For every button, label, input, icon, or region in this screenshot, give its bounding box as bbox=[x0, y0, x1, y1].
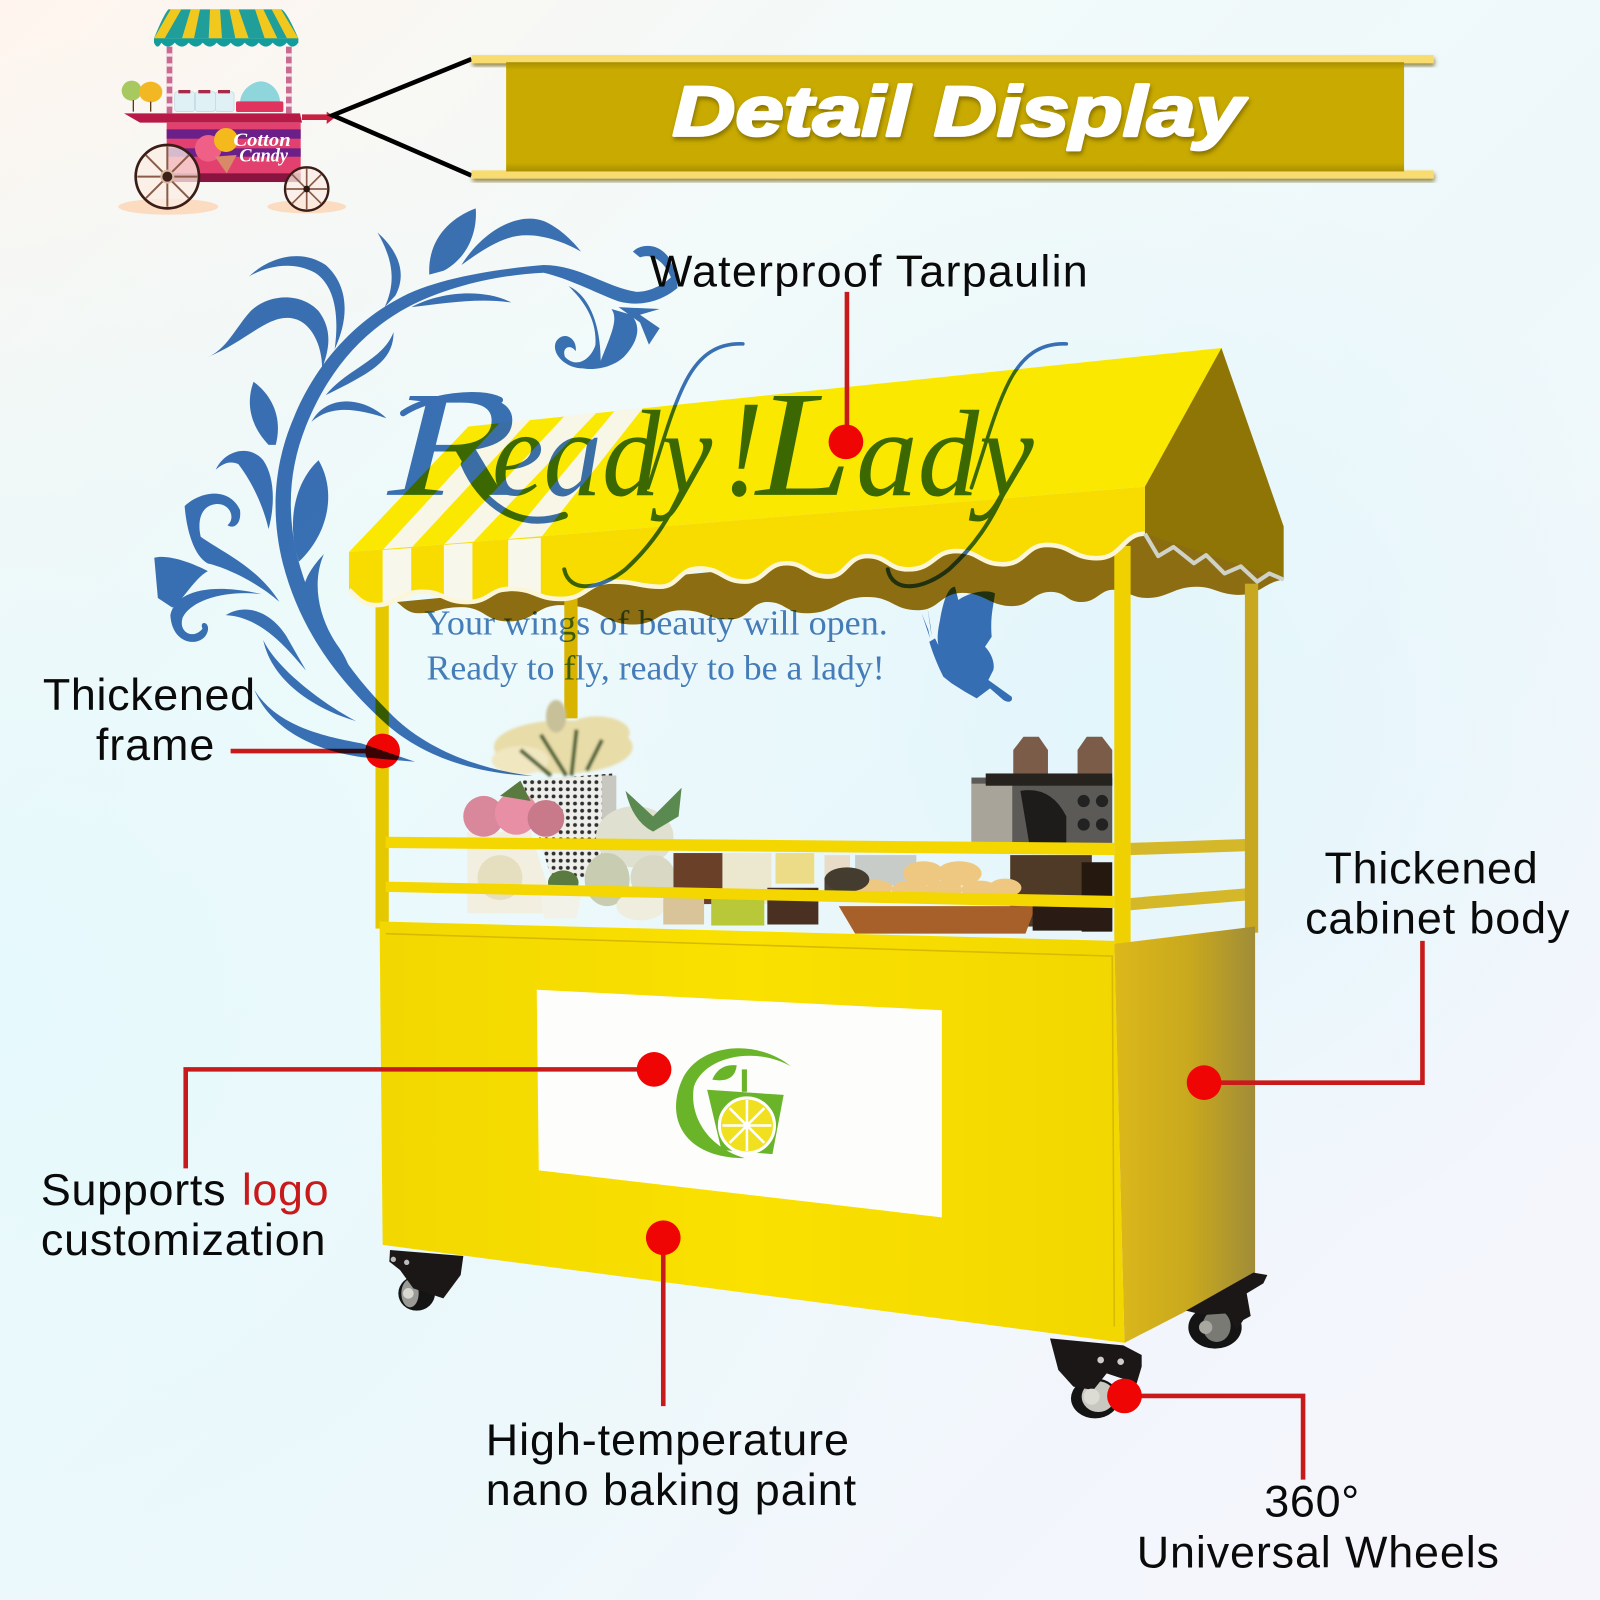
under canopy band bbox=[397, 531, 1284, 624]
label: 360 Universal Wheels: Universal Wheels bbox=[1137, 1526, 1499, 1577]
side zigzag trim bbox=[1145, 534, 1284, 582]
roof stripes bbox=[383, 408, 643, 550]
label: 360 Universal Wheels bbox=[1137, 1475, 1499, 1577]
left flower bbox=[185, 494, 279, 602]
label: High-temperature nano baking paint: nano baking paint bbox=[486, 1464, 857, 1515]
wheels bbox=[389, 1250, 1267, 1418]
label: Thickened frame: frame bbox=[96, 719, 214, 770]
swash strokes bbox=[403, 344, 1066, 586]
flowers in vase bbox=[492, 700, 633, 776]
candy text: Candy bbox=[239, 145, 288, 166]
label: Thickened frame: Thickened bbox=[43, 669, 255, 720]
label: Thickened cabinet body: cabinet body bbox=[1305, 893, 1570, 944]
items on counter bbox=[463, 737, 1112, 934]
valance stripes bbox=[383, 538, 541, 604]
succulents bbox=[596, 806, 673, 867]
icon: lemon cup logo bbox=[676, 1048, 791, 1158]
scallop trim bbox=[349, 534, 1145, 605]
label: Thickened frame bbox=[43, 669, 255, 770]
icon: butterfly bbox=[922, 587, 1012, 702]
cabinet front bbox=[380, 921, 1124, 1343]
callout markers and leader lines bbox=[186, 292, 1422, 1480]
label: Thickened cabinet body bbox=[1305, 843, 1570, 944]
canopy bbox=[349, 348, 1284, 605]
logo panel bbox=[537, 990, 942, 1217]
label: Supports logo customization bbox=[41, 1164, 329, 1265]
leader: logo bbox=[186, 1052, 671, 1168]
white planter bbox=[467, 832, 556, 913]
polka vase bbox=[522, 773, 612, 878]
side gable bbox=[1145, 348, 1284, 580]
cotton candy text: Cotton bbox=[233, 130, 291, 151]
leader: frame bbox=[231, 734, 400, 768]
icon: small cotton candy cart bbox=[118, 9, 346, 215]
label: Thickened cabinet body: Thickened bbox=[1324, 843, 1538, 894]
back right wheel bbox=[1186, 1273, 1267, 1349]
label: Waterproof Tarpaulin: Waterproof Tarpaulin bbox=[650, 246, 1088, 297]
left post bbox=[376, 597, 389, 929]
leader: paint bbox=[646, 1220, 681, 1406]
product boxes bbox=[673, 853, 722, 904]
label: 360 Universal Wheels: 360° bbox=[1264, 1475, 1359, 1526]
back post bbox=[564, 594, 578, 718]
watermark: Ready!Lady: R bbox=[386, 360, 518, 528]
connector lines to banner bbox=[333, 59, 471, 176]
heading: Detail Display bbox=[672, 72, 1249, 151]
front wheel bbox=[1050, 1338, 1142, 1418]
left wheel bbox=[389, 1250, 463, 1311]
rails bbox=[386, 837, 1114, 908]
watermark: Ready!Lady: ! bbox=[722, 372, 763, 525]
watermark: Ready!Lady bbox=[386, 360, 1034, 528]
watermark: Ready!Lady: eady bbox=[492, 387, 713, 522]
leader: tarpaulin bbox=[829, 292, 863, 459]
watermark tagline: Your wings of beauty will open. bbox=[424, 604, 888, 643]
right side rails bbox=[1131, 839, 1253, 910]
coffee machine bbox=[971, 778, 1112, 849]
icon: floral flourish bbox=[154, 208, 678, 776]
watermark tagline 2: Ready to fly, ready to be a lady! bbox=[427, 649, 885, 688]
right front post bbox=[1114, 546, 1131, 944]
stem bbox=[276, 265, 678, 776]
banner: Detail Display bbox=[471, 55, 1434, 179]
label: High-temperature nano baking paint: High-temperature bbox=[486, 1414, 849, 1465]
label: Supports logo customization: customization bbox=[41, 1214, 326, 1265]
leader: cabinet bbox=[1187, 941, 1422, 1100]
far right post bbox=[1245, 584, 1258, 933]
label: Supports logo customization: Supports bbox=[41, 1164, 226, 1215]
label: High-temperature nano baking paint bbox=[486, 1414, 857, 1515]
watermark logo bbox=[154, 208, 1066, 776]
tray and buns bbox=[839, 906, 1036, 934]
cabinet side bbox=[1114, 927, 1255, 1343]
watermark: Ready!Lady: L bbox=[754, 360, 852, 528]
label: Supports logo customization: logo bbox=[242, 1164, 329, 1215]
roof bbox=[349, 348, 1221, 552]
yellow kiosk cart bbox=[349, 348, 1284, 1418]
watermark: Ready!Lady: ady bbox=[856, 387, 1034, 522]
valance bbox=[349, 487, 1145, 605]
jars bbox=[1013, 737, 1048, 773]
leader: wheels bbox=[1107, 1379, 1303, 1480]
right flower bbox=[555, 286, 637, 369]
